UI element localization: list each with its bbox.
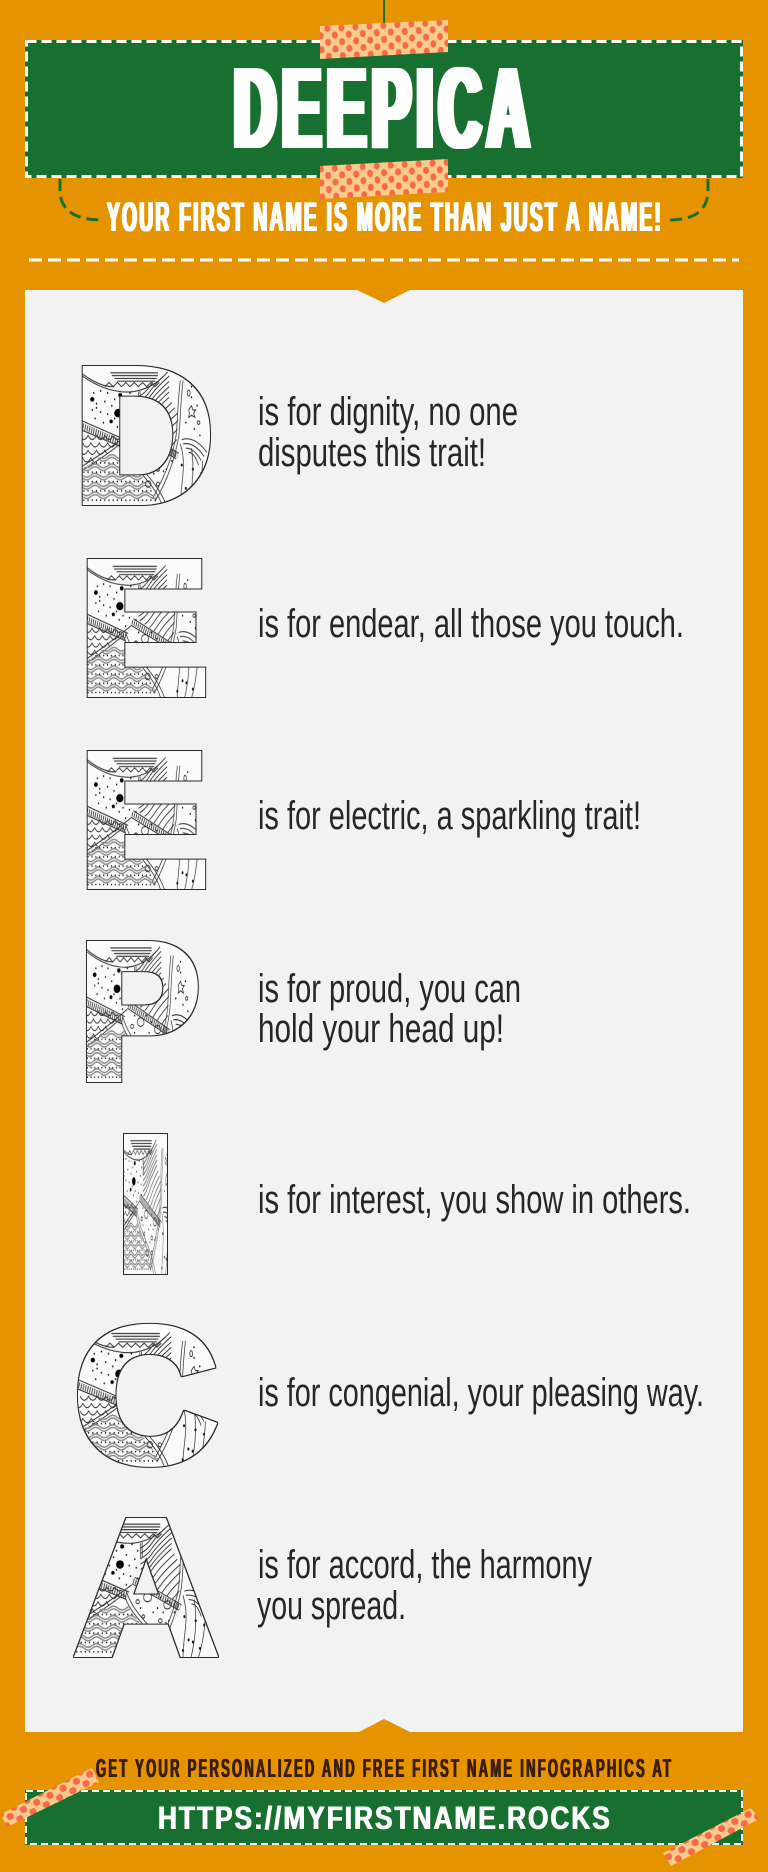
row: letter E — [79, 523, 684, 733]
icon: letter C: C — [74, 1290, 217, 1502]
icon: letter D: D — [74, 329, 214, 541]
panel: letters — [25, 289, 743, 1733]
icon: letter E: E — [79, 523, 208, 733]
row: letter C — [74, 1290, 704, 1502]
footer prompt: GET YOUR PERSONALIZED AND FREE FIRST NAME INFOGRAPHICS AT — [96, 1754, 671, 1783]
text: A meaning: is for accord, the harmony — [258, 1543, 592, 1587]
text: A meaning — [257, 1543, 592, 1628]
row: letter A — [75, 1481, 592, 1693]
text: P meaning — [258, 967, 521, 1051]
row: letter I — [114, 1097, 691, 1311]
footer banner — [25, 1790, 743, 1845]
text: D meaning — [258, 390, 518, 475]
text: P meaning: is for proud, you can — [258, 967, 521, 1011]
icon: letter A: A — [75, 1481, 217, 1693]
hanging line — [383, 0, 385, 24]
tape: bottom of banner — [320, 159, 448, 199]
bracket: right — [669, 179, 708, 220]
tape: footer left — [1, 1768, 99, 1827]
title: DEEPICA — [234, 44, 529, 173]
icon: letter P: P — [79, 904, 200, 1119]
icon: letter I: I — [114, 1097, 177, 1311]
tape: top — [320, 20, 448, 59]
footer URL: HTTPS://MYFIRSTNAME.ROCKS — [158, 1802, 610, 1837]
tape: footer right — [663, 1808, 759, 1866]
bracket: left — [60, 179, 103, 220]
title banner — [25, 40, 743, 178]
row: letter D — [74, 329, 518, 541]
text: D meaning: is for dignity, no one — [258, 390, 518, 434]
subtitle: YOUR FIRST NAME IS MORE THAN JUST A NAME! — [107, 192, 661, 240]
text: A meaning: you spread. — [257, 1584, 406, 1628]
row: second letter E — [79, 715, 641, 925]
row: letter P — [79, 904, 521, 1119]
text: D meaning: disputes this trait! — [258, 431, 486, 475]
text: P meaning: hold your head up! — [258, 1007, 504, 1051]
icon: second letter E: E — [79, 715, 208, 925]
